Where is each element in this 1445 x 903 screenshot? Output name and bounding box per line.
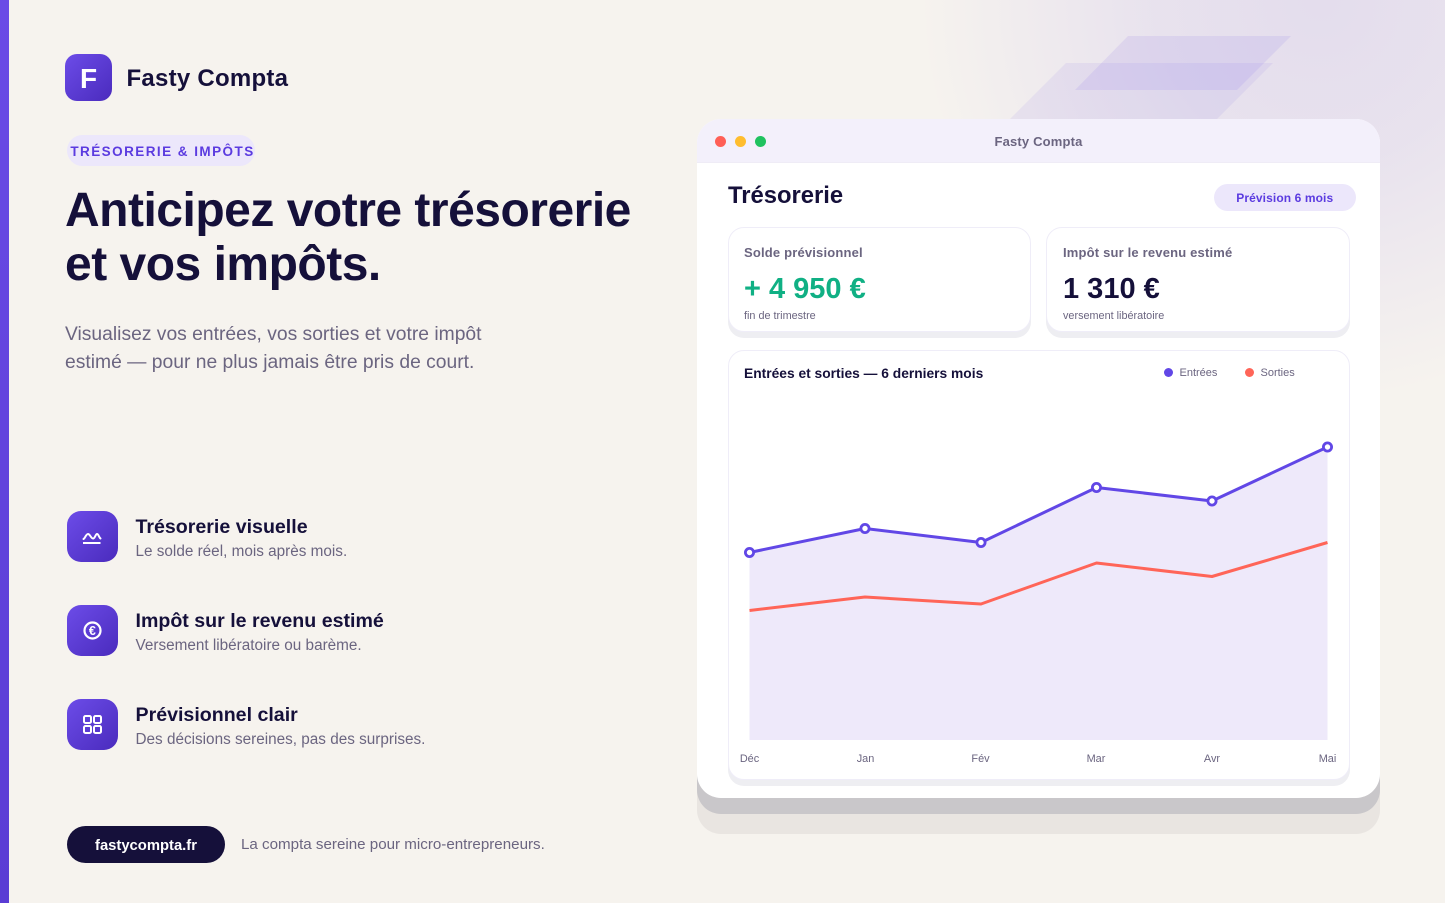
forecast pill bbox=[1214, 184, 1356, 211]
x axis labels bbox=[740, 753, 1336, 765]
card note: versement libératoire bbox=[1063, 310, 1164, 322]
footer tagline: La compta sereine pour micro-entrepreneurs. bbox=[241, 836, 545, 853]
legend: entrées: Entrées bbox=[1180, 366, 1217, 378]
card value: 1 310 € bbox=[1063, 272, 1160, 304]
app window bbox=[697, 119, 1380, 798]
feature description: Versement libératoire ou barème. bbox=[136, 636, 362, 654]
feature: trésorerie visuelle bbox=[67, 511, 347, 562]
area: entrées bbox=[750, 447, 1328, 740]
eyebrow badge: TRÉSORERIE & IMPÔTS bbox=[70, 144, 255, 159]
feature title: Trésorerie visuelle bbox=[136, 516, 308, 538]
x axis labels: Fév bbox=[971, 753, 990, 765]
x axis labels: Avr bbox=[1204, 753, 1220, 765]
main heading: Anticipez votre trésorerie bbox=[65, 184, 631, 237]
card value: + 4 950 € bbox=[744, 272, 866, 304]
icon: euro bbox=[67, 605, 118, 656]
main heading: et vos impôts. bbox=[65, 238, 381, 291]
card: impôt bbox=[1046, 227, 1350, 332]
feature: prévisionnel bbox=[67, 699, 425, 750]
title bar bbox=[697, 119, 1380, 163]
feature: impôt bbox=[67, 605, 384, 656]
eyebrow badge bbox=[67, 135, 255, 166]
x axis labels: Mai bbox=[1319, 753, 1336, 765]
window dots bbox=[715, 136, 766, 147]
left accent bar bbox=[0, 0, 9, 903]
card note: fin de trimestre bbox=[744, 310, 816, 322]
feature description: Le solde réel, mois après mois. bbox=[136, 542, 347, 560]
feature description: Des décisions sereines, pas des surprises. bbox=[136, 730, 425, 748]
logo name: Fasty Compta bbox=[126, 65, 288, 92]
footer url pill: fastycompta.fr bbox=[95, 838, 197, 854]
legend bbox=[1164, 366, 1295, 378]
x axis labels: Jan bbox=[857, 753, 874, 765]
subtitle bbox=[65, 324, 482, 372]
x axis labels: Déc bbox=[740, 753, 760, 765]
feature title: Prévisionnel clair bbox=[136, 704, 298, 726]
feature title: Impôt sur le revenu estimé bbox=[136, 610, 384, 632]
logo bbox=[65, 54, 288, 101]
card: solde bbox=[728, 227, 1031, 332]
line: entrées bbox=[745, 443, 1332, 557]
icon: euro: € bbox=[89, 624, 96, 638]
forecast pill: Prévision 6 mois bbox=[1236, 191, 1333, 205]
x axis labels: Mar bbox=[1087, 753, 1106, 765]
icon: chart wave bbox=[67, 511, 118, 562]
legend: sorties: Sorties bbox=[1260, 366, 1295, 378]
card label: Solde prévisionnel bbox=[744, 244, 863, 260]
line: sorties bbox=[750, 542, 1328, 610]
card label: Impôt sur le revenu estimé bbox=[1063, 244, 1232, 260]
logo icon bbox=[65, 54, 112, 101]
window title: Fasty Compta bbox=[994, 134, 1082, 149]
icon: grid bbox=[67, 699, 118, 750]
chart title: Entrées et sorties — 6 derniers mois bbox=[744, 366, 983, 380]
footer url pill bbox=[67, 826, 225, 863]
subtitle: Visualisez vos entrées, vos sorties et votre impôt bbox=[65, 324, 482, 344]
main heading bbox=[65, 184, 631, 291]
logo icon: F bbox=[80, 63, 97, 94]
legend: sorties bbox=[1245, 366, 1295, 378]
section heading: Trésorerie bbox=[728, 182, 843, 209]
subtitle: estimé — pour ne plus jamais être pris de court. bbox=[65, 352, 474, 372]
chart panel bbox=[728, 350, 1350, 780]
